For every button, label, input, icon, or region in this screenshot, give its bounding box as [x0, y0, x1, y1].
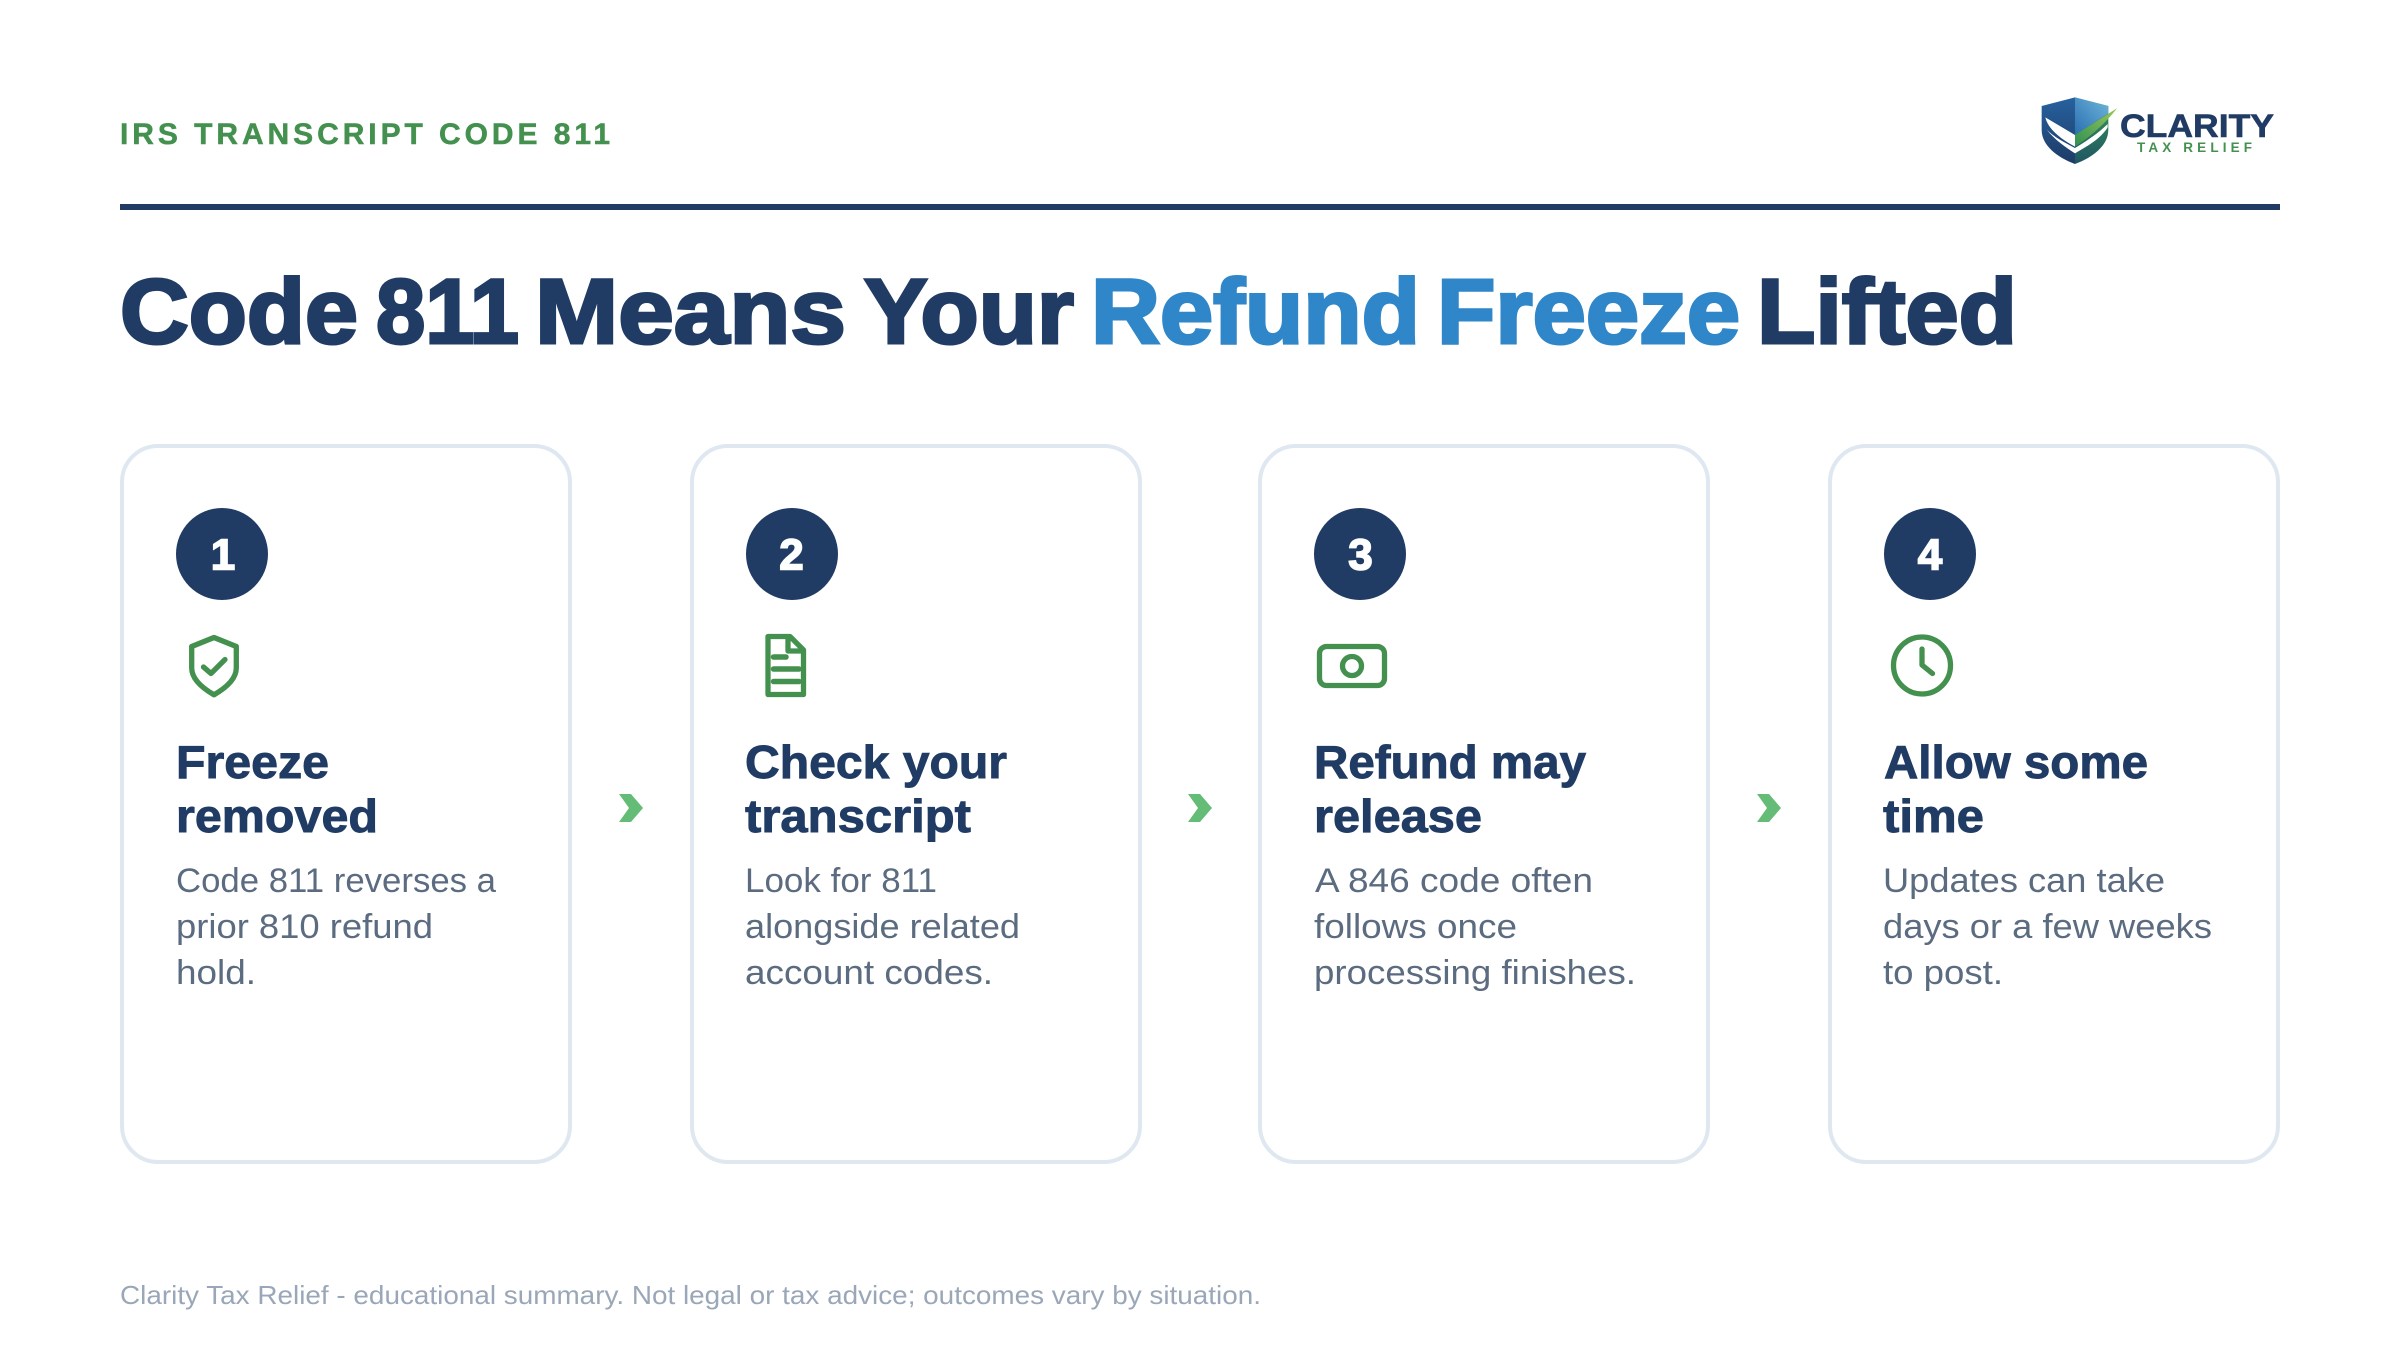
body text: Code 811 reverses a [176, 862, 496, 900]
title: Your [864, 261, 1074, 363]
title: Freeze [1437, 261, 1740, 363]
title: Lifted [1757, 261, 2017, 363]
body text: follows once [1314, 908, 1517, 946]
header rule [120, 204, 2280, 210]
logo tagline: TAX RELIEF [2137, 140, 2252, 155]
body text: A 846 code often [1315, 862, 1593, 900]
heading: release [1314, 790, 1482, 842]
footer disclaimer: Clarity Tax Relief - educational summary. Not legal or tax advice; outcomes vary by situation. [120, 1280, 1261, 1310]
arrow 1 [619, 794, 643, 822]
icon: banknote [1320, 646, 1384, 686]
body text: to post. [1883, 954, 2003, 992]
body text: processing finishes. [1314, 954, 1636, 992]
title: 811 [376, 261, 519, 363]
heading: Allow some [1884, 736, 2148, 788]
step number 1: 1 [211, 530, 235, 580]
title: Refund [1091, 261, 1420, 363]
title: Code [120, 261, 358, 363]
icon: shield check [192, 638, 236, 695]
body text: Updates can take [1883, 862, 2165, 900]
panel: step 4 [1830, 446, 2278, 1162]
body text: account codes. [745, 954, 993, 992]
logo: Clarity Tax Relief [2042, 97, 2274, 164]
body text: Look for 811 [745, 862, 937, 900]
body text: prior 810 refund [176, 908, 433, 946]
arrow 3 [1757, 794, 1781, 822]
body text: days or a few weeks [1883, 908, 2212, 946]
icon: document [768, 636, 804, 694]
logo wordmark: CLARITY [2120, 108, 2274, 144]
step number 4: 4 [1918, 530, 1943, 580]
heading: time [1883, 790, 1984, 842]
heading: Check your [745, 736, 1007, 788]
panel: step 3 [1260, 446, 1708, 1162]
step number 2: 2 [779, 530, 804, 580]
panel: step 2 [692, 446, 1140, 1162]
heading: removed [176, 790, 378, 842]
arrow 2 [1188, 794, 1212, 822]
icon: clock [1894, 637, 1950, 694]
title: Means [535, 261, 846, 363]
step number 4 [1884, 508, 1976, 600]
heading: Refund may [1314, 736, 1586, 788]
heading: transcript [745, 790, 971, 842]
heading: Freeze [176, 736, 329, 788]
body text: alongside related [745, 908, 1020, 946]
step number 1 [176, 508, 268, 600]
step number 3 [1314, 508, 1406, 600]
panel: step 1 [122, 446, 570, 1162]
step number 3: 3 [1348, 530, 1373, 580]
step number 2 [746, 508, 838, 600]
body text: hold. [176, 954, 256, 992]
icon: logo shield [2042, 97, 2117, 164]
kicker: IRS Transcript Code 811: IRS TRANSCRIPT CODE 811 [120, 118, 610, 151]
